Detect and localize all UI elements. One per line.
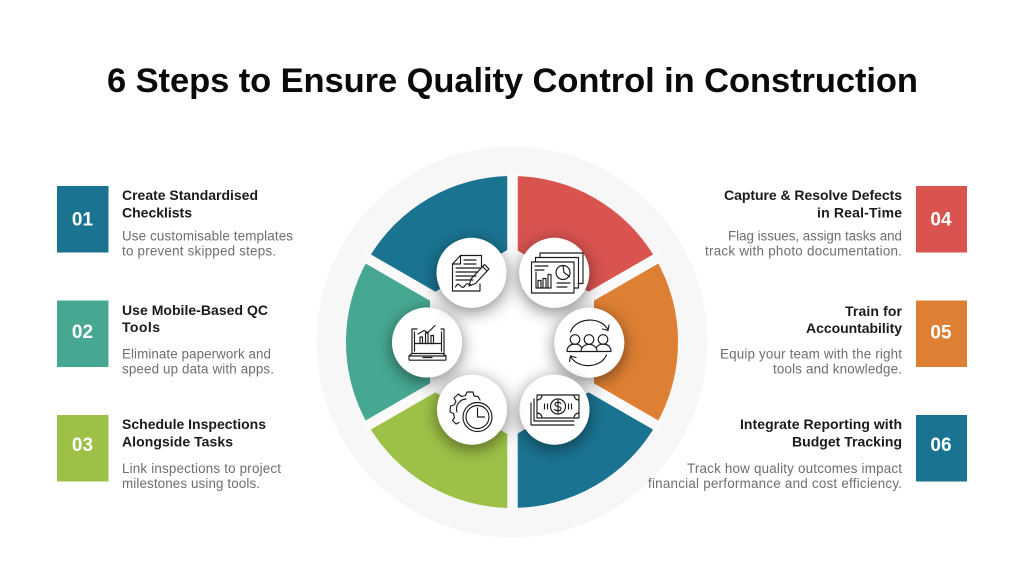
panel: step 02 [57,300,274,376]
text 04: Flag issues, assign tasks and [728,228,902,244]
icon circle: laptop chart [392,308,462,378]
segment 05 orange [512,259,678,425]
heading 02 [122,302,268,335]
text 06: financial performance and cost efficiency. [648,476,902,491]
text 06: Track how quality outcomes impact [687,461,902,476]
badge 02: 02 [72,322,93,343]
panel: step 01 [57,186,293,258]
text 05 [720,346,902,376]
badge 04 [916,186,967,252]
icon circle: report charts [519,238,589,308]
heading 04: Capture & Resolve Defects [724,187,902,203]
segment 06 blue [512,342,656,508]
segment 04 red [512,176,656,342]
segment 02 teal [346,259,512,425]
heading 06: Budget Tracking [792,434,902,450]
badge 04: 04 [930,210,952,230]
icon circle: team and arrows [554,308,624,378]
wheel segments [346,176,678,508]
icon circle: document and pencil [436,238,506,308]
text 04: track with photo documentation. [705,244,902,258]
heading 01: Checklists [122,204,192,220]
badge 05 [916,300,967,367]
heading 03 [122,416,266,450]
heading 02: Use Mobile-Based QC [122,302,268,318]
badge 01: 01 [72,210,93,230]
badge 03: 03 [72,435,93,456]
heading 01 [122,187,258,220]
badge 05: 05 [930,322,952,344]
heading 03: Alongside Tasks [122,434,233,450]
heading 04 [724,187,902,220]
heading 05 [806,303,903,336]
text 01: Use customisable templates [122,228,293,244]
segment 03 green [368,342,512,508]
heading 06: Integrate Reporting with [740,416,902,432]
heading 05: Train for [845,303,903,319]
text 03: milestones using tools. [122,476,260,491]
badge 03 [57,415,108,482]
text 05: tools and knowledge. [773,362,902,376]
badge 02 [57,300,108,367]
panel: step 04 [705,186,967,258]
panel: process wheel [316,146,708,538]
panel: step 05 [720,300,967,376]
icon circle: banknotes [520,375,590,445]
text 02: Eliminate paperwork and [122,346,271,362]
heading 01: Create Standardised [122,187,258,203]
badge 01 [57,186,108,252]
heading 02: Tools [122,319,160,335]
text 02 [122,346,274,376]
text 04 [705,228,902,258]
heading 04: in Real-Time [817,204,902,220]
panel: step 03 [57,415,281,491]
text 01 [122,228,293,258]
heading 03: Schedule Inspections [122,416,266,432]
segment 01 blue [368,176,512,342]
icon circle: gear and clock [437,375,507,445]
text 03: Link inspections to project [122,461,281,476]
text 01: to prevent skipped steps. [122,244,276,258]
title: 6 Steps to Ensure Quality Control in Construction [107,62,918,100]
panel: step 06 [648,415,967,491]
badge 06: 06 [930,435,952,456]
text 02: speed up data with apps. [122,362,274,376]
text 05: Equip your team with the right [720,346,902,362]
heading 06 [740,416,902,450]
wheel backdrop circle [316,146,708,538]
heading 05: Accountability [806,320,902,336]
text 03 [122,461,281,491]
badge 06 [916,415,967,482]
text 06 [648,461,902,491]
